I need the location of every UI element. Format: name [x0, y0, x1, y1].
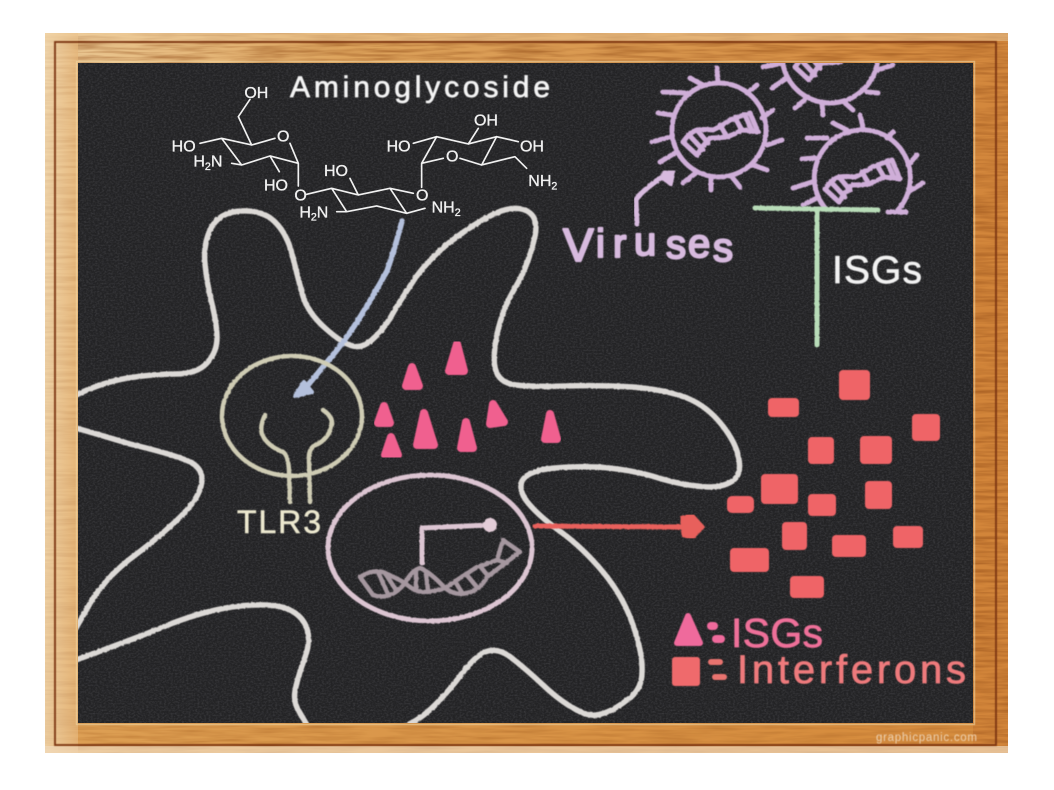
- molecule: aminoglycoside structure: OH: [244, 85, 268, 102]
- nucleus with gene and promoter: [328, 475, 532, 621]
- legend: Interferons: Interferons: [737, 648, 966, 692]
- legend: ISGs: ISGs: [731, 610, 823, 656]
- label: ISGs: ISGs: [832, 249, 922, 292]
- promoter arrow: [422, 518, 497, 563]
- molecule: aminoglycoside structure: 2: [205, 161, 211, 173]
- label: Viruses: e: [688, 222, 710, 266]
- molecule: aminoglycoside structure: HO: [387, 139, 411, 156]
- virus 2: [793, 115, 923, 212]
- molecule: aminoglycoside structure: O: [416, 188, 428, 205]
- inhibition bar from ISGs: [755, 208, 878, 345]
- label: Viruses: r: [613, 222, 626, 266]
- drawings on the board: [76, 7, 966, 726]
- molecule: aminoglycoside structure: HO: [172, 139, 196, 156]
- virus 1: [652, 68, 782, 190]
- molecule: aminoglycoside structure: O: [446, 149, 458, 166]
- molecule: aminoglycoside structure: O: [294, 188, 307, 205]
- molecule: aminoglycoside structure: OH: [520, 139, 544, 156]
- molecule: aminoglycoside structure: HO: [264, 178, 288, 195]
- molecule: aminoglycoside structure: 2: [455, 207, 461, 219]
- arrow: label to viruses: [636, 172, 674, 224]
- endosome with TLR3 receptor: [222, 356, 362, 502]
- interferon squares: [728, 371, 939, 597]
- molecule: aminoglycoside structure: OH: [474, 113, 498, 130]
- molecule: aminoglycoside structure: 2: [311, 212, 317, 224]
- chalkboard: [78, 63, 973, 723]
- icon: DNA helix: [360, 540, 520, 596]
- legend: [672, 610, 966, 692]
- label: Viruses: s: [713, 226, 733, 270]
- molecule: aminoglycoside structure: O: [277, 129, 289, 146]
- molecule: aminoglycoside structure: H: [299, 204, 311, 221]
- legend: ISGs: [673, 612, 823, 649]
- label: Viruses: u: [634, 220, 656, 264]
- label: TLR3: TLR3: [237, 504, 321, 540]
- label: Viruses: i: [596, 222, 605, 266]
- label: Viruses: s: [666, 223, 686, 267]
- molecule: aminoglycoside structure: NH: [432, 200, 455, 217]
- arrow: aminoglycoside into endosome: [295, 221, 402, 396]
- molecule: aminoglycoside structure: N: [317, 204, 328, 221]
- legend: Interferons: [671, 652, 966, 687]
- virus 3: [760, 63, 896, 118]
- cell outline: [76, 208, 740, 726]
- arrow: interferon secretion: [535, 516, 702, 537]
- heading: Aminoglycoside: Aminoglycoside: [290, 71, 550, 104]
- watermark: graphicpanic.com: [876, 732, 977, 744]
- ISG triangles in the cytoplasm: [378, 344, 557, 455]
- molecule: aminoglycoside structure: H: [193, 154, 205, 171]
- molecule: aminoglycoside structure: HO: [324, 163, 348, 180]
- label: Viruses: V: [563, 219, 594, 271]
- molecule: aminoglycoside structure: N: [211, 154, 222, 171]
- molecule: aminoglycoside structure: [172, 85, 557, 224]
- molecule: aminoglycoside structure: 2: [551, 180, 557, 192]
- molecule: aminoglycoside structure: NH: [528, 173, 551, 190]
